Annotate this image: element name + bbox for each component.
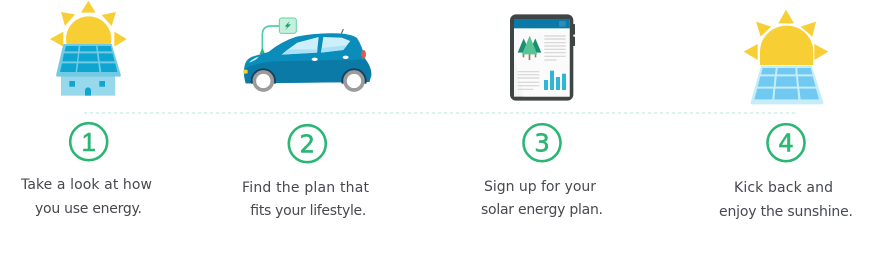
screen xyxy=(514,19,570,97)
side buttons xyxy=(572,24,575,35)
sun rays xyxy=(744,10,828,60)
sun rays xyxy=(50,1,127,47)
wheel arches xyxy=(251,68,276,94)
door handles xyxy=(312,58,318,61)
step 1 number badge: 1 xyxy=(81,127,96,157)
step 3 text: solar energy plan. xyxy=(481,202,603,218)
step 4 text: enjoy the sunshine. xyxy=(719,204,853,220)
step 2 text xyxy=(242,180,370,219)
step 2 number badge xyxy=(289,125,326,162)
car body xyxy=(244,33,371,83)
step 1 text: Take a look at how xyxy=(20,177,152,193)
step 1 number badge xyxy=(70,123,107,160)
icon: sun over house with solar roof xyxy=(50,1,127,96)
front window xyxy=(282,37,319,55)
step 4 text xyxy=(719,180,853,220)
charging cable and plug xyxy=(262,26,280,52)
report text lines bottom xyxy=(518,72,539,89)
step 3 text xyxy=(481,179,603,218)
house windows and door xyxy=(69,81,105,96)
sun disc xyxy=(760,26,813,65)
screen header xyxy=(514,19,570,28)
step 4 text: Kick back and xyxy=(734,180,833,196)
charger sign xyxy=(279,18,296,33)
tablet frame xyxy=(510,14,573,101)
icon: tablet with energy report xyxy=(510,14,575,101)
step 1 text xyxy=(20,177,152,217)
icon: sun over solar panel xyxy=(744,10,828,104)
step 3 number badge xyxy=(524,124,560,161)
step 3 number badge: 3 xyxy=(534,129,550,158)
front wheel xyxy=(254,72,272,90)
solar panel xyxy=(751,66,823,104)
rear wheel xyxy=(345,72,363,90)
icon: electric car charging xyxy=(243,18,371,97)
step 2 text: Find the plan that xyxy=(242,180,370,196)
step 2 text: fits your lifestyle. xyxy=(250,203,366,219)
headlight xyxy=(249,57,259,63)
step 1 text: you use energy. xyxy=(35,201,142,217)
step 2 number badge: 2 xyxy=(300,130,315,159)
report text lines top xyxy=(544,36,566,60)
house wall xyxy=(61,75,115,96)
step 4 number badge xyxy=(768,124,804,161)
rear window xyxy=(321,37,350,53)
antenna xyxy=(341,29,343,35)
yellow marker light xyxy=(243,70,248,74)
trees xyxy=(518,36,541,60)
sun disc xyxy=(66,16,111,62)
tail light xyxy=(361,50,366,59)
step 4 number badge: 4 xyxy=(778,129,794,158)
step 3 text: Sign up for your xyxy=(484,179,596,195)
bar chart xyxy=(544,71,566,90)
roof solar panel xyxy=(56,44,121,77)
